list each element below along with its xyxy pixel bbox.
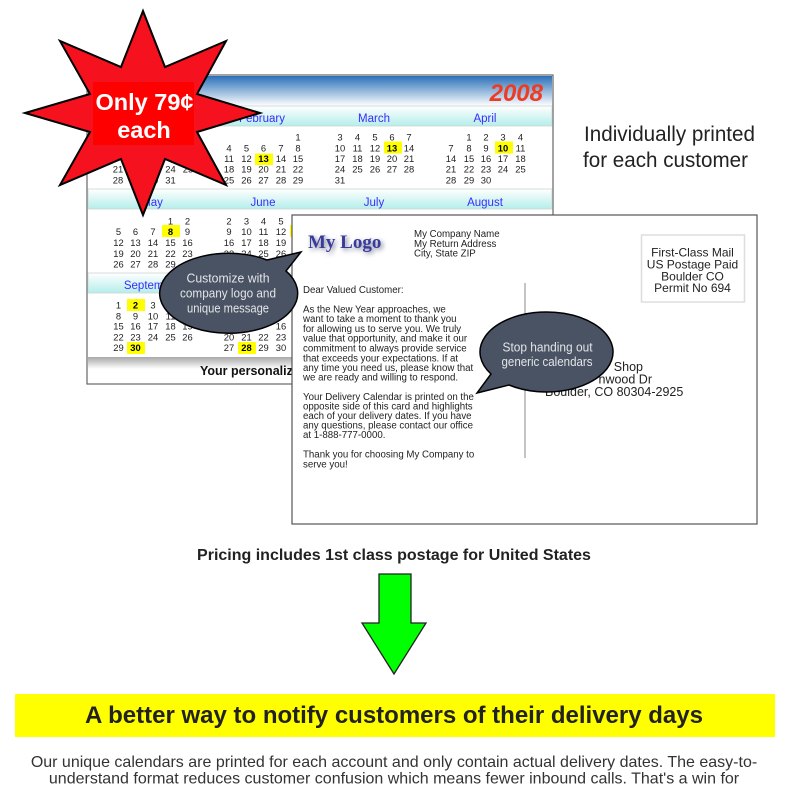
calendar dates: 26 xyxy=(241,174,252,186)
calendar dates: 10 xyxy=(148,310,158,322)
letter text: for allowing us to serve you. We truly xyxy=(303,324,461,335)
calendar dates: 23 xyxy=(148,164,158,174)
calendar dates: 5 xyxy=(244,142,249,154)
month names xyxy=(124,113,504,292)
calendar dates: 15 xyxy=(165,237,176,248)
letter text: value that opportunity, and make it our xyxy=(303,334,468,344)
calendar dates: 22 xyxy=(113,332,124,342)
fold divider xyxy=(524,283,526,458)
calendar dates: 13 xyxy=(258,153,269,164)
callout: generic calendars: Stop handing out xyxy=(502,340,593,354)
return address: My Company Name xyxy=(414,229,500,240)
calendar dates: 2 xyxy=(226,216,232,226)
calendar dates: 8 xyxy=(133,142,138,153)
calendar dates: 8 xyxy=(466,142,472,154)
calendar dates: 13 xyxy=(387,142,397,154)
calendar dates: 2 xyxy=(483,132,489,142)
letter text: serve you! xyxy=(303,460,348,470)
calendar dates: 5 xyxy=(372,132,378,142)
calendar dates: 22 xyxy=(293,164,303,174)
calendar dates: 2 xyxy=(133,300,138,310)
month names: August xyxy=(467,197,504,209)
side note xyxy=(583,123,755,172)
calendar dates: 17 xyxy=(241,237,252,248)
calendar dates: 18 xyxy=(515,153,526,164)
calendar dates: 31 xyxy=(335,174,345,186)
calendar dates: 10 xyxy=(241,226,252,237)
calendar dates: 18 xyxy=(224,164,234,174)
postage indicia: Boulder CO xyxy=(661,270,724,284)
calendar dates: 15 xyxy=(293,153,303,164)
calendar dates: 11 xyxy=(353,142,362,154)
calendar dates: 23 xyxy=(224,248,234,259)
postage indicia xyxy=(642,235,744,302)
calendar dates: 12 xyxy=(276,226,286,237)
calendar dates: 31 xyxy=(165,174,176,186)
calendar dates: 30 xyxy=(130,342,141,353)
calendar dates: 25 xyxy=(183,164,193,174)
calendar dates: 29 xyxy=(258,342,269,353)
callout: customize: company logo and xyxy=(180,286,276,300)
calendar dates: 21 xyxy=(241,332,252,342)
calendar dates: 16 xyxy=(130,320,141,332)
calendar dates: 8 xyxy=(116,310,121,322)
calendar dates: 9 xyxy=(185,226,190,237)
calendar dates: 19 xyxy=(370,153,380,164)
letter text: at 1-888-777-0000. xyxy=(303,430,385,441)
calendar dates: 17 xyxy=(498,153,508,164)
callout: generic calendars xyxy=(477,312,613,393)
calendar dates: 29 xyxy=(130,174,141,186)
calendar dates: 21 xyxy=(113,164,123,174)
calendar dates: 7 xyxy=(448,142,454,154)
letter text: Thank you for choosing My Company to xyxy=(303,450,474,460)
month band row 3 xyxy=(88,273,552,293)
delivery date highlights xyxy=(127,142,513,354)
month names: February xyxy=(239,113,285,125)
calendar dates: 11 xyxy=(516,142,525,154)
calendar dates: 4 xyxy=(261,216,266,226)
calendar dates: 16 xyxy=(182,237,193,248)
letter text: As the New Year approaches, we xyxy=(303,304,446,316)
body text: understand format reduces customer confusion which means fewer inbound calls. That's a win for xyxy=(49,770,740,787)
month band row 2 xyxy=(88,189,552,209)
calendar dates: 22 xyxy=(258,332,269,342)
calendar dates: 9 xyxy=(483,142,489,154)
calendar dates: 10 xyxy=(335,142,345,154)
calendar dates: 14 xyxy=(404,142,414,154)
month names: March xyxy=(358,113,390,125)
month band row 1 xyxy=(88,106,552,126)
letter text: that exceeds your expectations. If at xyxy=(303,354,458,364)
calendar dates: 19 xyxy=(113,248,124,259)
calendar dates: 25 xyxy=(224,174,234,186)
logo: My Logo xyxy=(308,232,381,253)
calendar dates: 10 xyxy=(498,142,508,154)
calendar dates: 24 xyxy=(498,164,508,174)
calendar header band xyxy=(88,76,552,106)
calendar dates: 30 xyxy=(481,174,491,186)
calendar dates: 26 xyxy=(182,332,193,342)
calendar dates: 23 xyxy=(276,332,286,342)
calendar dates: 20 xyxy=(224,332,234,342)
calendar dates: 11 xyxy=(259,226,268,237)
calendar dates: 1 xyxy=(116,300,121,310)
calendar dates: 26 xyxy=(113,258,124,270)
calendar dates: 28 xyxy=(446,174,456,186)
calendar dates: 24 xyxy=(241,248,252,259)
calendar dates: 23 xyxy=(481,164,491,174)
callout: customize: Customize with xyxy=(186,270,270,286)
return address: City, State ZIP xyxy=(414,248,476,260)
calendar dates: 11 xyxy=(224,153,234,164)
calendar dates: 26 xyxy=(276,248,286,259)
headline banner xyxy=(15,694,775,737)
calendar dates: 3 xyxy=(244,216,249,226)
panel: calendar xyxy=(87,75,553,384)
calendar dates: 27 xyxy=(224,342,234,353)
calendar dates xyxy=(113,132,526,353)
calendar dates: 12 xyxy=(241,153,252,164)
calendar dates: 5 xyxy=(116,226,121,237)
headline banner: A better way to notify customers of their delivery days xyxy=(85,702,703,729)
postage indicia: First-Class Mail xyxy=(651,246,734,260)
calendar dates: 18 xyxy=(258,237,269,248)
calendar dates: 30 xyxy=(148,174,158,186)
calendar dates: 16 xyxy=(224,237,234,248)
calendar dates: 1 xyxy=(295,132,301,142)
calendar dates: 19 xyxy=(276,237,286,248)
calendar dates: 25 xyxy=(352,164,363,174)
return address: My Return Address xyxy=(414,239,497,250)
calendar dates: 7 xyxy=(406,132,412,142)
callout: generic calendars: generic calendars xyxy=(502,354,593,369)
calendar dates: 23 xyxy=(130,332,141,342)
calendar dates: 16 xyxy=(481,153,491,164)
side note: for each customer xyxy=(583,149,748,172)
calendar dates: 27 xyxy=(258,174,269,186)
calendar dates: 12 xyxy=(370,142,380,154)
calendar dates: 27 xyxy=(130,258,141,270)
calendar dates: 22 xyxy=(165,248,176,259)
calendar dates: 17 xyxy=(148,320,158,332)
calendar dates: 21 xyxy=(404,153,414,164)
calendar dates: 22 xyxy=(464,164,474,174)
side note: Individually printed xyxy=(584,123,755,146)
calendar dates: 21 xyxy=(276,164,286,174)
letter text: Your Delivery Calendar is printed on the xyxy=(303,392,474,403)
price unit: each xyxy=(117,117,171,143)
recipient address: nwood Dr xyxy=(598,372,652,386)
letter text: Dear Valued Customer: xyxy=(303,285,404,296)
calendar dates: 21 xyxy=(148,248,158,259)
calendar dates: 2 xyxy=(185,216,190,226)
calendar dates: 30 xyxy=(276,342,286,353)
calendar dates: 20 xyxy=(258,164,269,174)
calendar dates: 18 xyxy=(165,320,176,332)
month names: September xyxy=(124,280,180,292)
calendar dates: 15 xyxy=(113,320,124,332)
letter text xyxy=(302,285,474,470)
postage indicia: Permit No 694 xyxy=(654,281,731,295)
month names: October xyxy=(243,280,284,292)
calendar dates: 16 xyxy=(276,320,286,332)
calendar dates: 3 xyxy=(337,132,343,142)
postage indicia: US Postage Paid xyxy=(647,258,738,272)
letter text: want to take a moment to thank you xyxy=(302,314,456,325)
calendar dates: 24 xyxy=(335,164,345,174)
calendar dates: 5 xyxy=(278,216,284,226)
calendar dates: 29 xyxy=(165,258,176,270)
letter text: opposite side of this card and highlights xyxy=(303,402,473,412)
calendar dates: 19 xyxy=(182,320,193,332)
callout: customize: unique message xyxy=(187,300,269,316)
calendar dates: 25 xyxy=(258,248,269,259)
recipient address xyxy=(545,360,683,399)
recipient address: Shop xyxy=(614,360,643,374)
calendar dates: 28 xyxy=(113,174,123,186)
calendar dates: 15 xyxy=(464,153,474,164)
letter text: any time you need us, please know that xyxy=(303,363,473,374)
calendar dates: 13 xyxy=(130,237,141,248)
calendar dates: 8 xyxy=(295,142,301,154)
calendar dates: 6 xyxy=(389,132,395,142)
calendar dates: 9 xyxy=(133,310,138,322)
calendar dates: 21 xyxy=(446,164,456,174)
calendar dates: 20 xyxy=(387,153,397,164)
calendar dates: 24 xyxy=(148,332,158,342)
calendar dates: 29 xyxy=(464,174,474,186)
letter text: commitment to always provide service xyxy=(303,344,467,354)
calendar dates: 14 xyxy=(276,153,286,164)
calendar dates: 7 xyxy=(150,226,156,237)
return address xyxy=(414,229,500,260)
panel: postcard back xyxy=(292,215,757,524)
month names: July xyxy=(364,197,384,209)
calendar footer text: Your personalized xyxy=(200,364,307,378)
calendar dates: 4 xyxy=(518,132,523,142)
calendar dates: 27 xyxy=(387,164,397,174)
calendar dates: 9 xyxy=(226,226,232,237)
calendar dates: 11 xyxy=(183,142,193,153)
calendar dates: 11 xyxy=(166,310,175,322)
calendar dates: 28 xyxy=(276,174,286,186)
calendar dates: 28 xyxy=(404,164,414,174)
callout: customize xyxy=(160,252,301,333)
calendar dates: 20 xyxy=(130,248,141,259)
pricing note: Pricing includes 1st class postage for United States xyxy=(197,547,591,564)
calendar dates: 17 xyxy=(335,153,345,164)
calendar dates: 23 xyxy=(182,248,193,259)
calendar dates: 25 xyxy=(515,164,526,174)
calendar dates: 26 xyxy=(370,164,380,174)
calendar footer band xyxy=(88,357,552,369)
calendar dates: 7 xyxy=(278,142,284,154)
calendar dates: 29 xyxy=(293,174,303,186)
calendar dates: 29 xyxy=(113,342,124,353)
calendar dates: 28 xyxy=(241,342,252,353)
calendar dates: 8 xyxy=(168,226,173,237)
calendar dates: 22 xyxy=(130,164,141,174)
arrow: down xyxy=(362,574,426,674)
calendar dates: 3 xyxy=(500,132,506,142)
calendar dates: 1 xyxy=(168,216,173,226)
starburst: price xyxy=(25,11,260,215)
body text: Our unique calendars are printed for each account and only contain actual delivery dates. The easy-to- xyxy=(31,754,757,771)
calendar dates: 12 xyxy=(113,237,124,248)
calendar dates: 14 xyxy=(148,237,158,248)
letter text: each of your delivery dates. If you have xyxy=(303,411,472,422)
month names: January xyxy=(133,113,174,125)
month names: April xyxy=(473,113,497,125)
calendar dates: 28 xyxy=(148,258,158,270)
price background xyxy=(93,82,194,145)
calendar dates: 25 xyxy=(165,332,176,342)
calendar dates: 18 xyxy=(352,153,363,164)
calendar dates: 19 xyxy=(241,164,252,174)
calendar dates: 4 xyxy=(355,132,360,142)
calendar dates: 4 xyxy=(226,142,232,154)
calendar dates: 6 xyxy=(133,226,138,237)
calendar dates: 10 xyxy=(165,142,176,153)
letter text: any questions, please contact our office xyxy=(303,420,473,432)
calendar year: 2008 xyxy=(489,80,544,107)
calendar dates: 1 xyxy=(466,132,472,142)
calendar dates: 14 xyxy=(446,153,456,164)
recipient address: Boulder, CO 80304-2925 xyxy=(545,385,683,399)
price text: Only 79¢ xyxy=(96,89,193,115)
calendar dates: 9 xyxy=(150,142,156,153)
calendar dates: 24 xyxy=(165,164,176,174)
calendar dates: 6 xyxy=(261,142,266,154)
month names: May xyxy=(141,197,163,209)
letter text: we are ready and willing to respond. xyxy=(302,372,458,384)
calendar dates: 3 xyxy=(150,300,156,310)
month names: June xyxy=(251,197,275,209)
body text xyxy=(31,754,757,787)
